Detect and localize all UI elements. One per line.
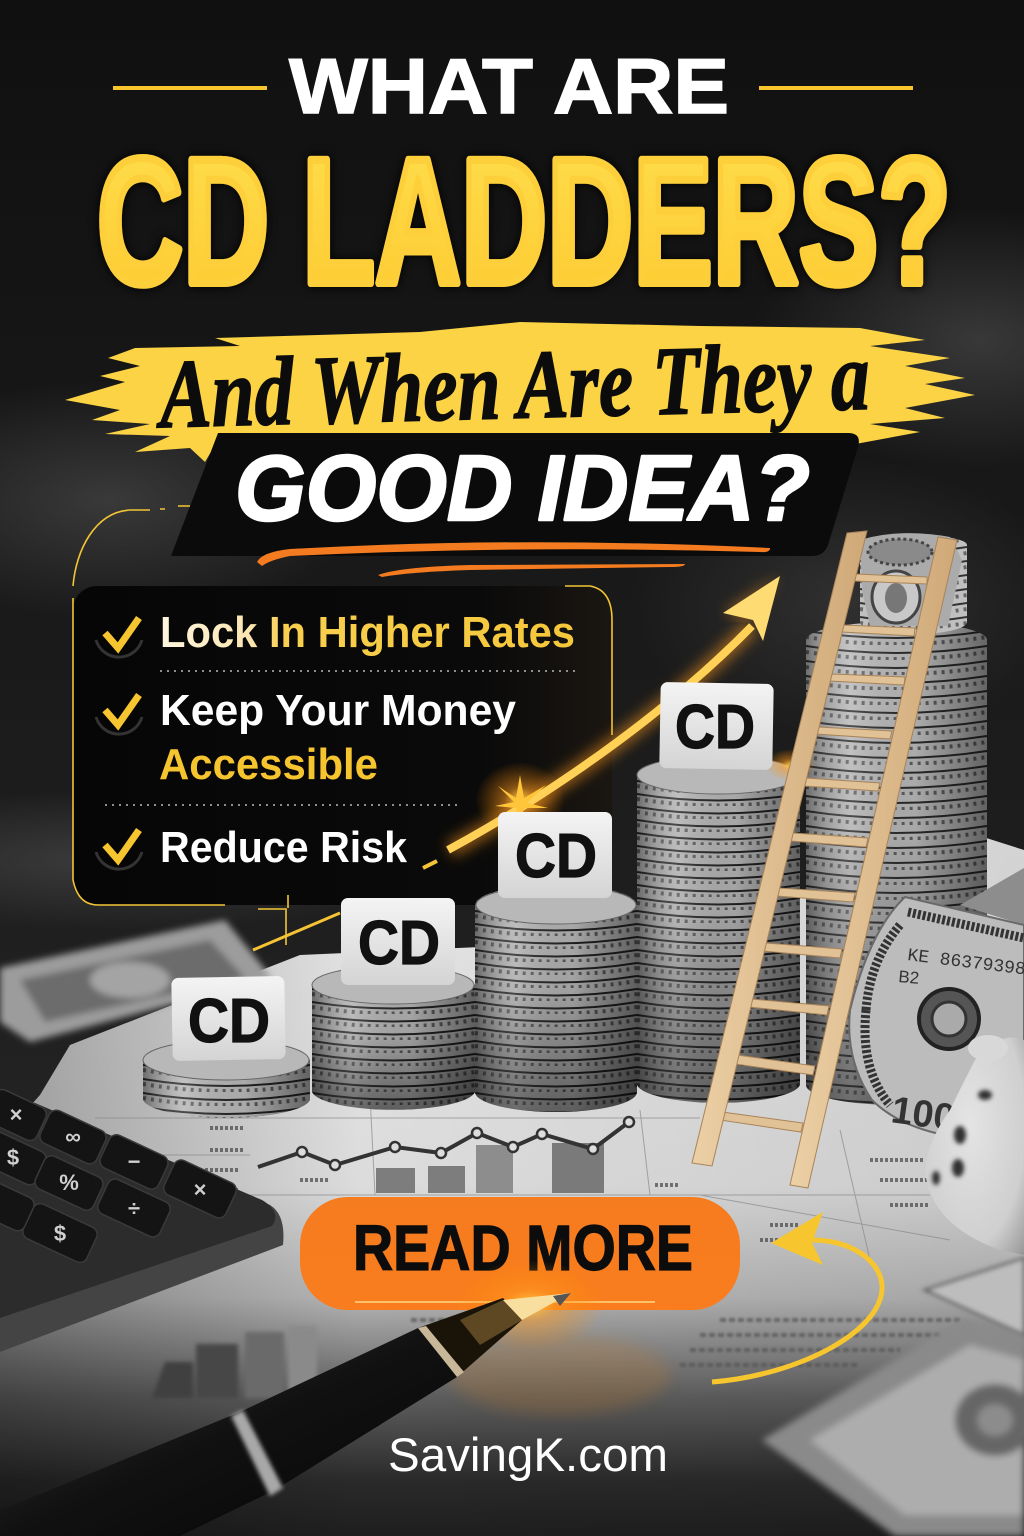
rising arrow with glow [423,576,780,868]
read more button [300,1197,740,1310]
benefit: reduce risk: Reduce Risk [160,823,407,872]
coin stack 1 [143,1040,310,1118]
coin stack 4 [637,749,815,1103]
dollar bills right: B2 [898,967,920,988]
dollar bills right [849,868,1024,1140]
coin stack 3 [475,885,637,1112]
CD card 1 [171,976,286,1061]
dollar bills right: KE 86379398 [906,946,1024,980]
check icon 1 [96,618,142,657]
check icon 3 [96,830,142,869]
callout panel [73,506,612,945]
black banner [171,433,859,556]
coin stack back [806,533,987,1105]
calculator: × [194,1177,206,1202]
CD card 4 [659,682,774,770]
CD card 2: CD [358,909,440,978]
curved arrow to read more [712,1212,882,1382]
check icon 2 [96,695,142,734]
blurred bill bottom right [762,1318,1024,1536]
ladder [692,531,957,1188]
title: what are: WHAT ARE [289,42,729,130]
calculator: ÷ [128,1196,140,1221]
benefit: lock in higher rates: Lock In Higher Rates [160,608,575,657]
yellow brush stroke [65,322,975,462]
title line right [759,86,913,90]
CD card 3: CD [515,822,597,891]
benefit: keep your money accessible: Keep Your Money [160,686,517,735]
CD card 3 [498,812,612,898]
calculator [0,1087,283,1352]
pen [0,1260,670,1536]
read more button: READ MORE [353,1212,693,1284]
coin stack 2 [312,966,475,1110]
lower blurred bar chart [152,1326,317,1398]
benefit: keep your money accessible: Accessible [159,740,378,789]
paper line chart and bars [258,1117,634,1193]
banner text: GOOD IDEA? [235,436,810,540]
calculator: − [128,1149,140,1174]
title line left [113,86,267,90]
document paper on table [0,836,1024,1536]
calculator: ∞ [65,1124,81,1149]
calculator: × [10,1102,22,1127]
calculator: % [59,1170,79,1195]
orange underline [257,542,770,577]
CD card 4: CD [675,693,755,762]
calculator: $ [54,1221,66,1246]
blurred dollar bill left [0,920,272,1042]
CD card 1: CD [188,987,270,1056]
site name: SavingK.com [388,1428,668,1481]
dollar bills right: 100 [889,1089,957,1140]
piggy bank [925,1035,1024,1255]
small bill right [925,1258,1024,1335]
calculator: $ [7,1145,19,1170]
rising arrow, lower segment [253,913,340,950]
benefit: keep your money accessible [159,686,517,789]
CD card 2 [341,898,455,985]
